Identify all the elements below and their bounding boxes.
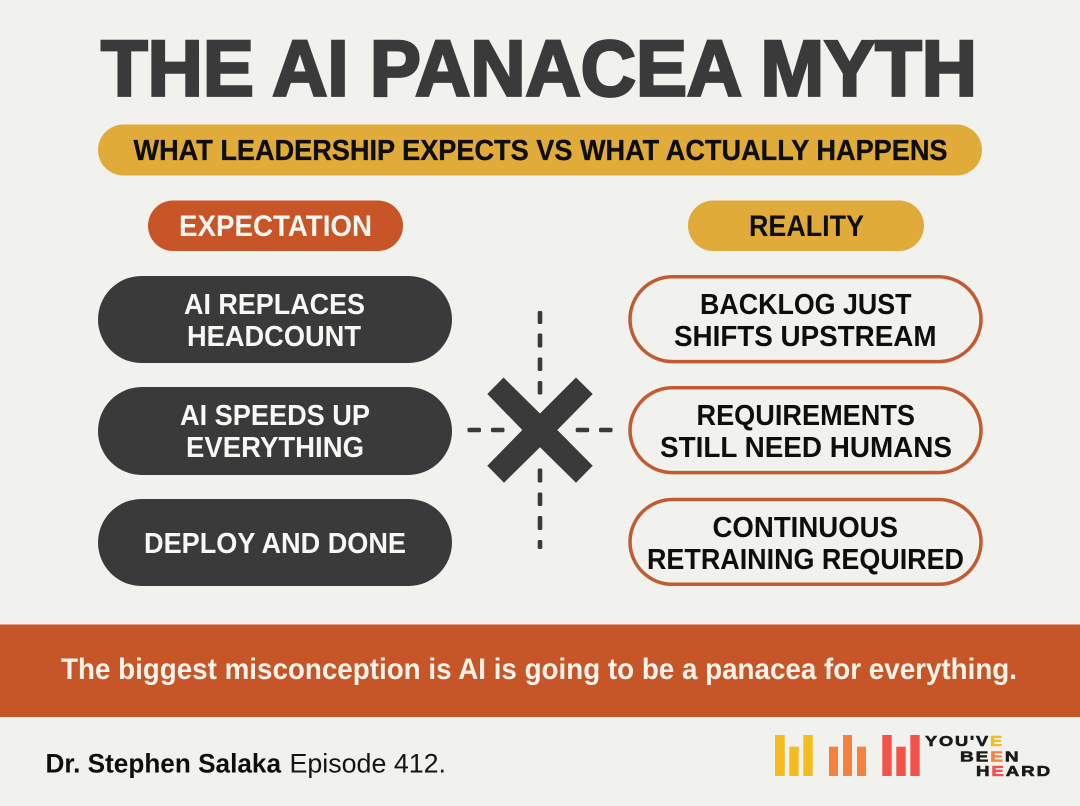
icon: crossed X with dashed axes [468,311,612,549]
expectation: AI speeds up everything [98,387,452,475]
logo wordmark: HEARD [976,763,1052,780]
logo: You've Been Heard [775,733,1052,780]
title: THE AI PANACEA MYTH [101,24,977,112]
expectation: AI replaces headcount: AI REPLACES [184,289,365,321]
quote banner [0,624,1080,717]
reality: backlog shifts upstream: BACKLOG JUST [700,289,912,321]
subtitle banner [98,124,982,176]
heading: reality: REALITY [749,210,864,243]
subtitle banner: WHAT LEADERSHIP EXPECTS VS WHAT ACTUALLY HAPPENS [134,135,948,167]
reality: continuous retraining required: RETRAINING REQUIRED [647,544,964,576]
reality: requirements still need humans [630,388,981,473]
reality: requirements still need humans: STILL NEED HUMANS [660,432,952,464]
heading: expectation: EXPECTATION [179,210,372,243]
heading: reality [688,200,924,251]
quote banner: The biggest misconception is AI is going to be a panacea for everything. [61,653,1017,686]
reality: continuous retraining required [630,500,981,584]
icon: yellow bars [775,735,813,776]
expectation: AI speeds up everything: EVERYTHING [186,432,364,464]
icon: red bars [882,735,920,776]
heading: expectation [148,200,403,251]
logo wordmark [925,733,1052,780]
panel: expectation column [98,276,452,586]
reality: backlog shifts upstream [630,277,981,362]
expectation: deploy and done: DEPLOY AND DONE [144,528,406,560]
footer credit: Dr. Stephen Salaka [46,748,282,778]
expectation: AI replaces headcount: HEADCOUNT [187,321,361,353]
footer credit: Episode 412. [290,748,446,778]
logo wordmark: BE EN [960,748,1020,766]
expectation: AI speeds up everything: AI SPEEDS UP [180,400,370,432]
icon: orange bars [829,735,866,776]
reality: requirements still need humans: REQUIREMENTS [696,400,915,432]
expectation: AI replaces headcount [98,276,452,363]
panel: reality column [630,277,981,584]
reality: backlog shifts upstream: SHIFTS UPSTREAM [674,321,936,353]
footer credit [46,748,446,778]
expectation: deploy and done [98,499,452,586]
reality: continuous retraining required: CONTINUOUS [712,512,898,544]
logo wordmark: YOU'V E [925,733,1004,750]
